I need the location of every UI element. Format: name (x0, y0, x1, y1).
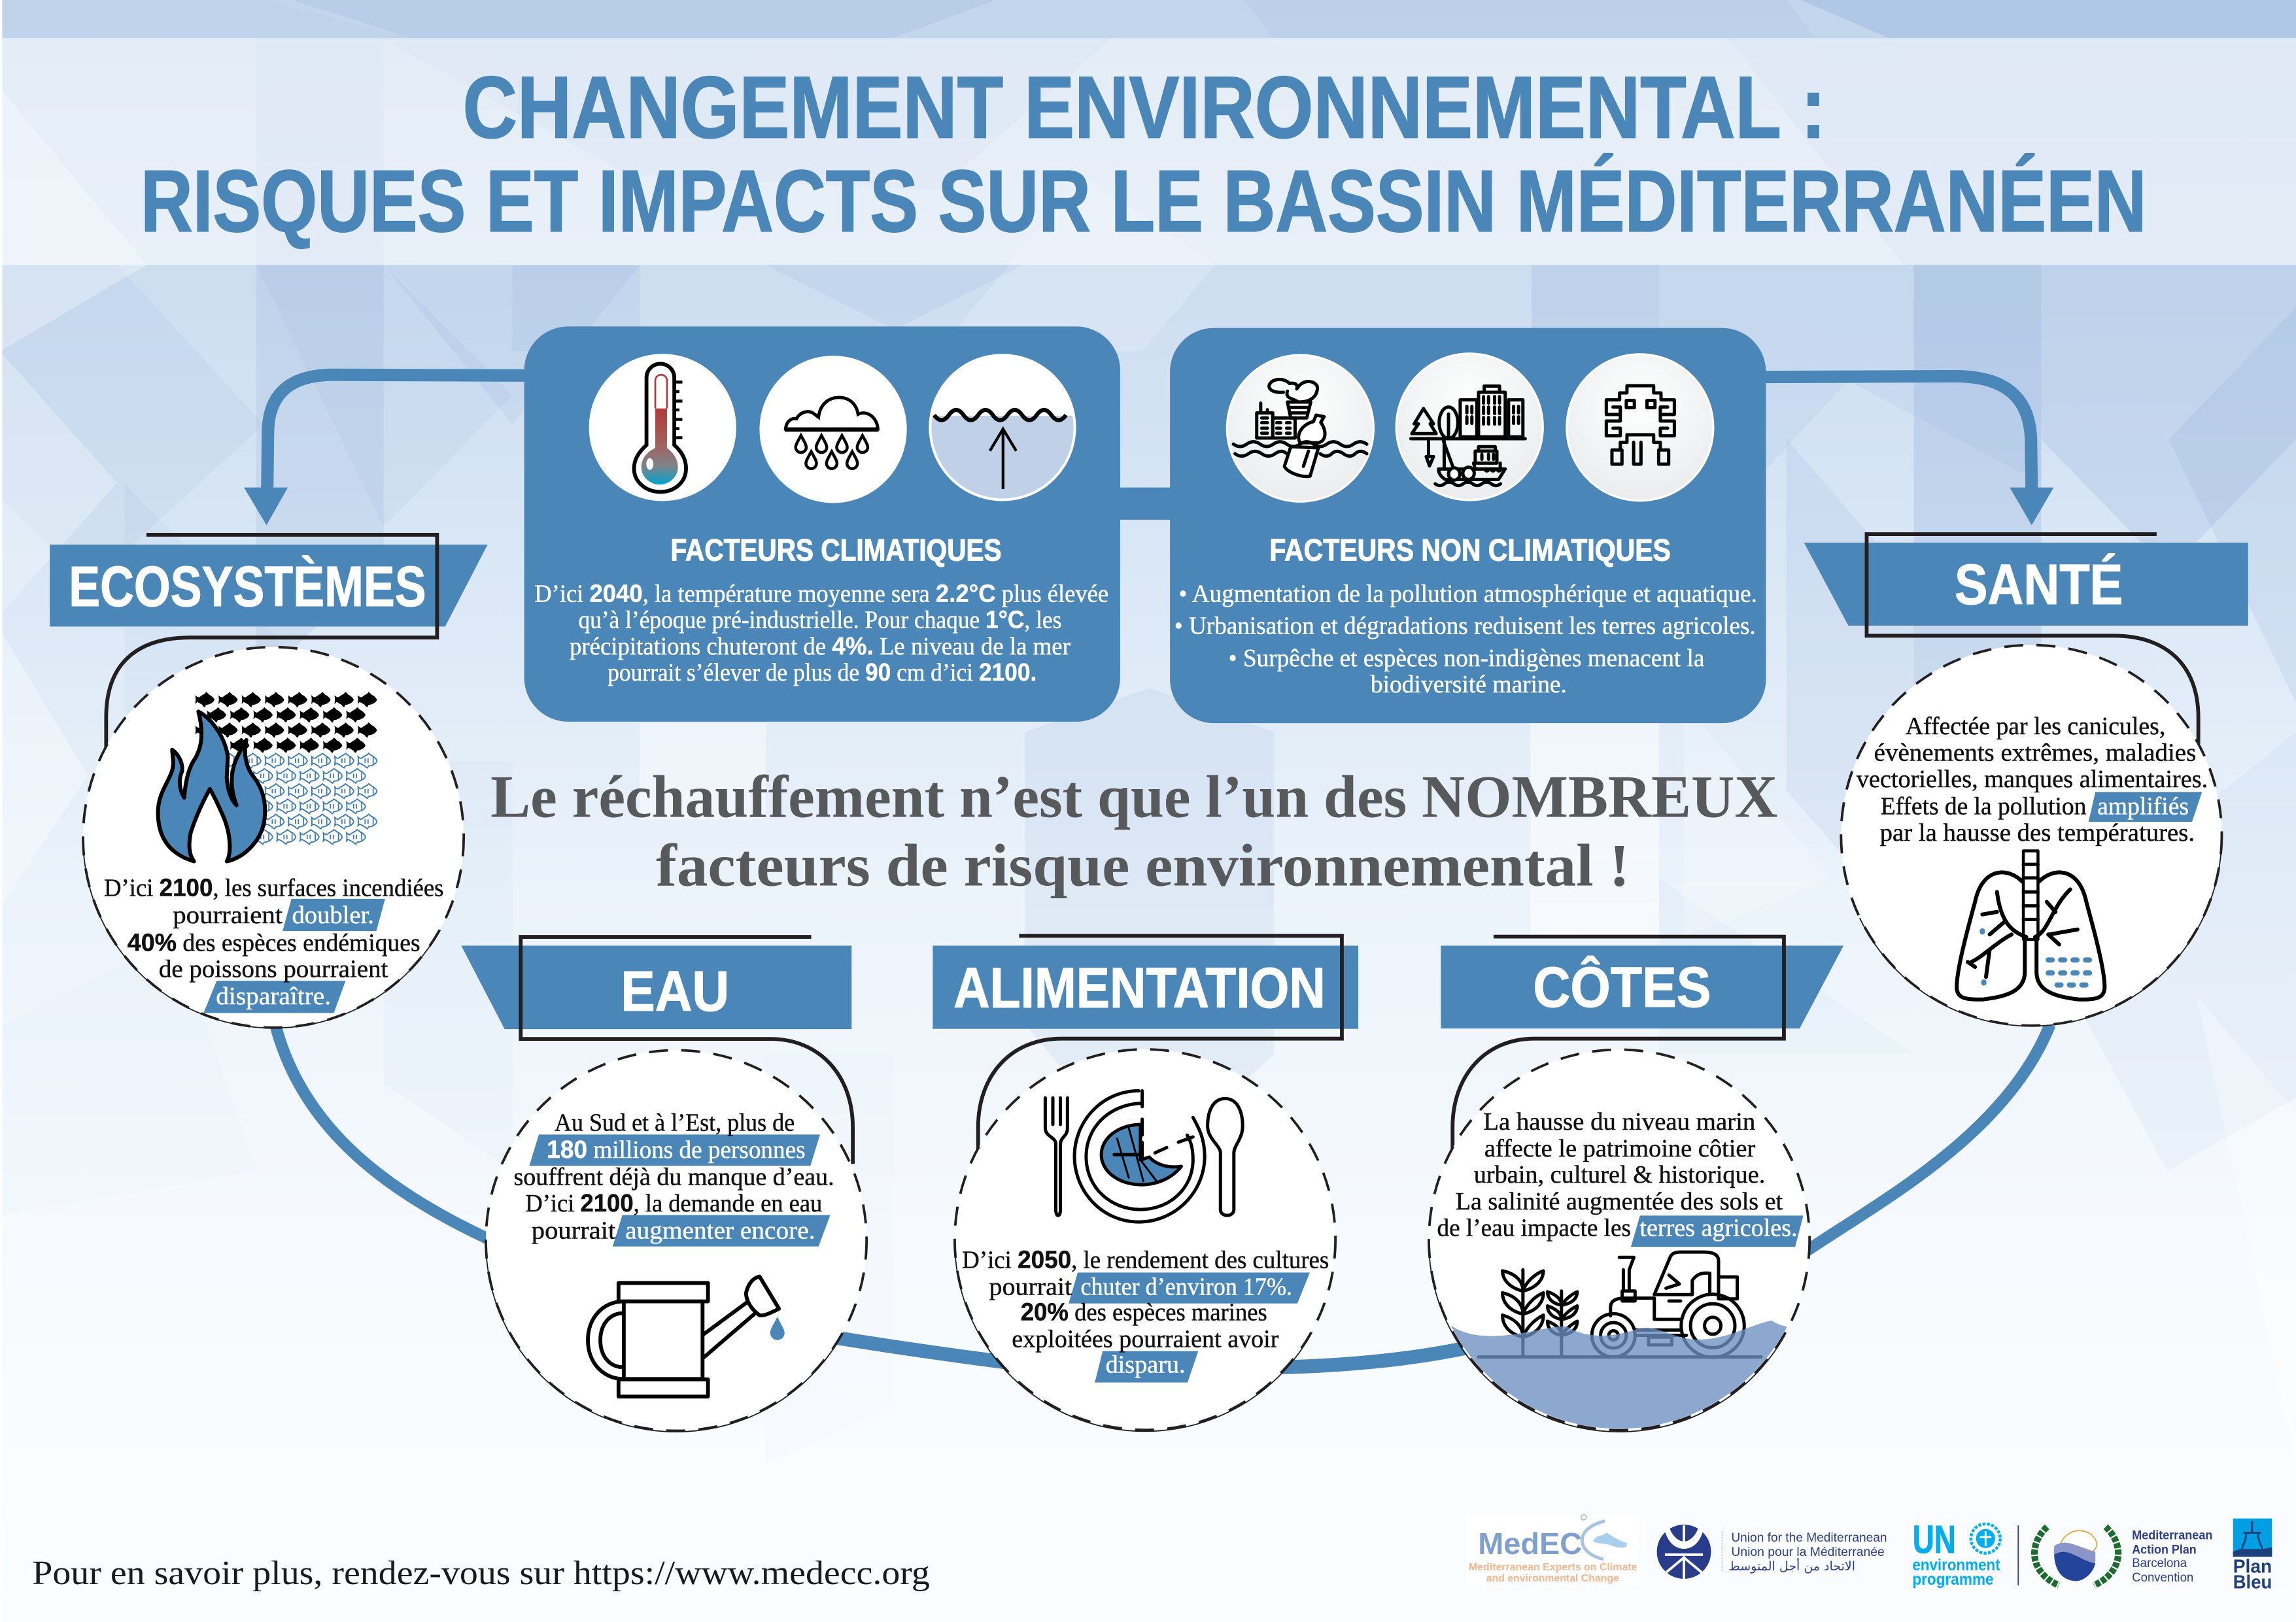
icon: rain cloud (759, 356, 907, 503)
section: Ecosystèmes (50, 535, 488, 1028)
logo: Plan Bleu: Plan (2233, 1557, 2272, 1578)
text: Alimentation: D’ici 2050, le rendement des cultures (962, 1247, 1329, 1274)
text: Eau: pourrait (532, 1217, 616, 1244)
text: non-climate factors: • Surpêche et espèces non-indigènes menacent la (1229, 645, 1704, 672)
logo: UN environment programme: UN (1913, 1517, 1956, 1562)
frame: Alimentation (978, 936, 1342, 1152)
logo: Union for the Mediterranean: الاتحاد من أجل المتوسط (1728, 1558, 1855, 1574)
text: Côtes: de l’eau impacte les (1437, 1215, 1631, 1242)
text: Ecosystèmes: doubler. (292, 902, 374, 929)
logo: Mediterranean Action Plan: Convention (2132, 1570, 2193, 1585)
text: Santé (1857, 713, 2208, 847)
text: Eau: Au Sud et à l’Est, plus de (555, 1109, 795, 1137)
text: non-climate factors: biodiversité marine. (1371, 671, 1567, 698)
text: Eau: D’ici 2100, la demande en eau (525, 1190, 822, 1217)
section: Alimentation (933, 936, 1358, 1431)
text: climate factors: D’ici 2040, la température moyenne sera 2.2°C plus élevée (534, 580, 1108, 607)
panel: non-climate factors (1170, 328, 1766, 723)
text: Côtes: La salinité augmentée des sols et (1456, 1188, 1783, 1215)
logo: MedECC: Mediterranean Experts on Climate (1469, 1562, 1637, 1573)
icon: flame (158, 711, 265, 861)
arrow: non-climate panel to Santé (1766, 376, 2053, 525)
logo: Plan Bleu (2233, 1519, 2272, 1593)
text: Ecosystèmes: pourraient (173, 902, 283, 929)
text: Côtes: La hausse du niveau marin (1483, 1108, 1755, 1136)
footer link: Pour en savoir plus, rendez-vous sur https://www.medecc.org (32, 1555, 930, 1592)
logo: Union for the Mediterranean: Union pour la Méditerranée (1731, 1545, 1885, 1559)
logo: Mediterranean Action Plan (2034, 1527, 2212, 1585)
logo: Mediterranean Action Plan: Action Plan (2132, 1542, 2197, 1557)
heading: Alimentation: ALIMENTATION (953, 956, 1326, 1020)
icon: pollution (1227, 355, 1373, 501)
icon: rising sea level (923, 354, 1084, 503)
banner: Ecosystèmes (50, 545, 488, 626)
text: non-climate factors: • Augmentation de la pollution atmosphérique et aquatique. (1179, 580, 1757, 607)
circle: Côtes (1429, 1049, 1809, 1432)
text: non-climate factors (1174, 580, 1757, 698)
text: Santé: Affectée par les canicules, (1906, 713, 2165, 740)
logo: MedECC: and environmental Change (1486, 1573, 1619, 1584)
text: Alimentation: 20% des espèces marines (1021, 1299, 1267, 1326)
text: Ecosystèmes: disparaître. (216, 983, 331, 1010)
text: Côtes: urbain, culturel & historique. (1474, 1161, 1765, 1189)
frame: Eau (521, 937, 853, 1164)
text: Côtes (1437, 1108, 1804, 1247)
logo: Plan Bleu: Bleu (2233, 1572, 2272, 1593)
banner: Santé (1804, 543, 2248, 626)
text: Eau: augmenter encore. (625, 1217, 815, 1244)
section: Eau (461, 937, 866, 1432)
central message (490, 763, 1777, 899)
text: Santé: par la hausse des températures. (1880, 819, 2195, 847)
text: Alimentation: pourrait (989, 1273, 1072, 1300)
heading: Côtes: CÔTES (1533, 955, 1711, 1019)
icon: wheat and tractor (1479, 1252, 1761, 1357)
logo: MedECC: MedEC (1478, 1527, 1582, 1561)
text: Eau: 180 millions de personnes (547, 1136, 806, 1164)
frame: Ecosystèmes (106, 535, 437, 749)
logo: Mediterranean Action Plan: Barcelona (2132, 1556, 2187, 1570)
icon: fish population (195, 692, 377, 844)
text: climate factors: qu’à l’époque pré-industrielle. Pour chaque 1°C, les (578, 607, 1061, 634)
text: Côtes: terres agricoles. (1639, 1215, 1798, 1242)
connector between factor panels (1113, 488, 1177, 520)
text: climate factors: pourrait s’élever de plus de 90 cm d’ici 2100. (608, 659, 1037, 686)
heading: Ecosystèmes: ECOSYSTÈMES (69, 554, 426, 618)
section: Santé (1804, 534, 2248, 1026)
logo: UN environment programme: environment (1912, 1557, 2000, 1574)
text: Ecosystèmes: de poissons pourraient (159, 955, 388, 983)
icon: watering can (588, 1277, 785, 1396)
heading: non-climate factors: FACTEURS NON CLIMATIQUES (1269, 533, 1671, 567)
circle: Ecosystèmes (83, 647, 464, 1028)
icon: thermometer (589, 354, 736, 501)
text: Alimentation: exploitées pourraient avoir (1012, 1325, 1279, 1353)
logo: Union for the Mediterranean: Union for the Mediterranean (1731, 1530, 1887, 1545)
text: non-climate factors: • Urbanisation et dégradations reduisent les terres agricoles. (1174, 613, 1756, 640)
text: climate factors (534, 580, 1108, 686)
icon: plate and cutlery (1045, 1090, 1242, 1222)
logo: MedECC (1465, 1515, 1639, 1585)
icon: invasive species (1567, 354, 1713, 501)
logo: Union for the Mediterranean (1657, 1525, 1887, 1580)
circle: Santé (1841, 645, 2221, 1026)
section: Côtes (1420, 937, 1843, 1442)
text: Ecosystèmes: 40% des espèces endémiques (128, 929, 420, 956)
icon: urbanisation and shipping (1396, 354, 1543, 500)
banner: Alimentation (933, 946, 1358, 1029)
circle: Eau (486, 1050, 866, 1432)
central message: facteurs de risque environnemental ! (656, 832, 1630, 899)
frame: Santé (1866, 534, 2199, 743)
text: Côtes: affecte le patrimoine côtier (1484, 1135, 1756, 1162)
text: climate factors: précipitations chuteront de 4%. Le niveau de la mer (570, 633, 1071, 660)
text: Ecosystèmes: D’ici 2100, les surfaces incendiées (104, 874, 443, 902)
logo: UN environment programme (1912, 1517, 2018, 1589)
text: Ecosystèmes (104, 874, 443, 1013)
central message: Le réchauffement n’est que l’un des NOMBREUX (490, 763, 1777, 830)
heading: climate factors: FACTEURS CLIMATIQUES (671, 533, 1002, 567)
banner: Côtes (1441, 946, 1843, 1028)
text: Eau (513, 1109, 834, 1247)
logo: Mediterranean Action Plan: Mediterranean (2132, 1528, 2212, 1542)
heading: Eau: EAU (621, 959, 729, 1023)
text: Eau: souffrent déjà du manque d’eau. (513, 1164, 834, 1191)
text: Alimentation: disparu. (1106, 1351, 1186, 1378)
big blue arc linking the themes (275, 1024, 2050, 1367)
circle: Alimentation (955, 1049, 1335, 1431)
title: CHANGEMENT ENVIRONNEMENTAL : (463, 58, 1826, 156)
text: Alimentation (962, 1247, 1329, 1383)
heading: Santé: SANTÉ (1955, 552, 2123, 617)
text: Santé: vectorielles, manques alimentaires. (1857, 766, 2208, 793)
banner: Eau (461, 946, 851, 1029)
title (141, 58, 2147, 250)
arrow: climate panel to Ecosystèmes (244, 375, 524, 525)
icon: lungs (1957, 851, 2104, 1000)
panel: climate factors (524, 326, 1120, 722)
text: Santé: Effets de la pollution (1881, 793, 2086, 820)
text: Santé: amplifiés (2097, 793, 2189, 820)
logo: UN environment programme: programme (1912, 1571, 1994, 1589)
text: Alimentation: chuter d’environ 17%. (1080, 1273, 1292, 1300)
text: Santé: évènements extrêmes, maladies (1874, 739, 2196, 767)
frame: Côtes (1452, 937, 1784, 1152)
water overlay (1450, 1321, 1787, 1429)
